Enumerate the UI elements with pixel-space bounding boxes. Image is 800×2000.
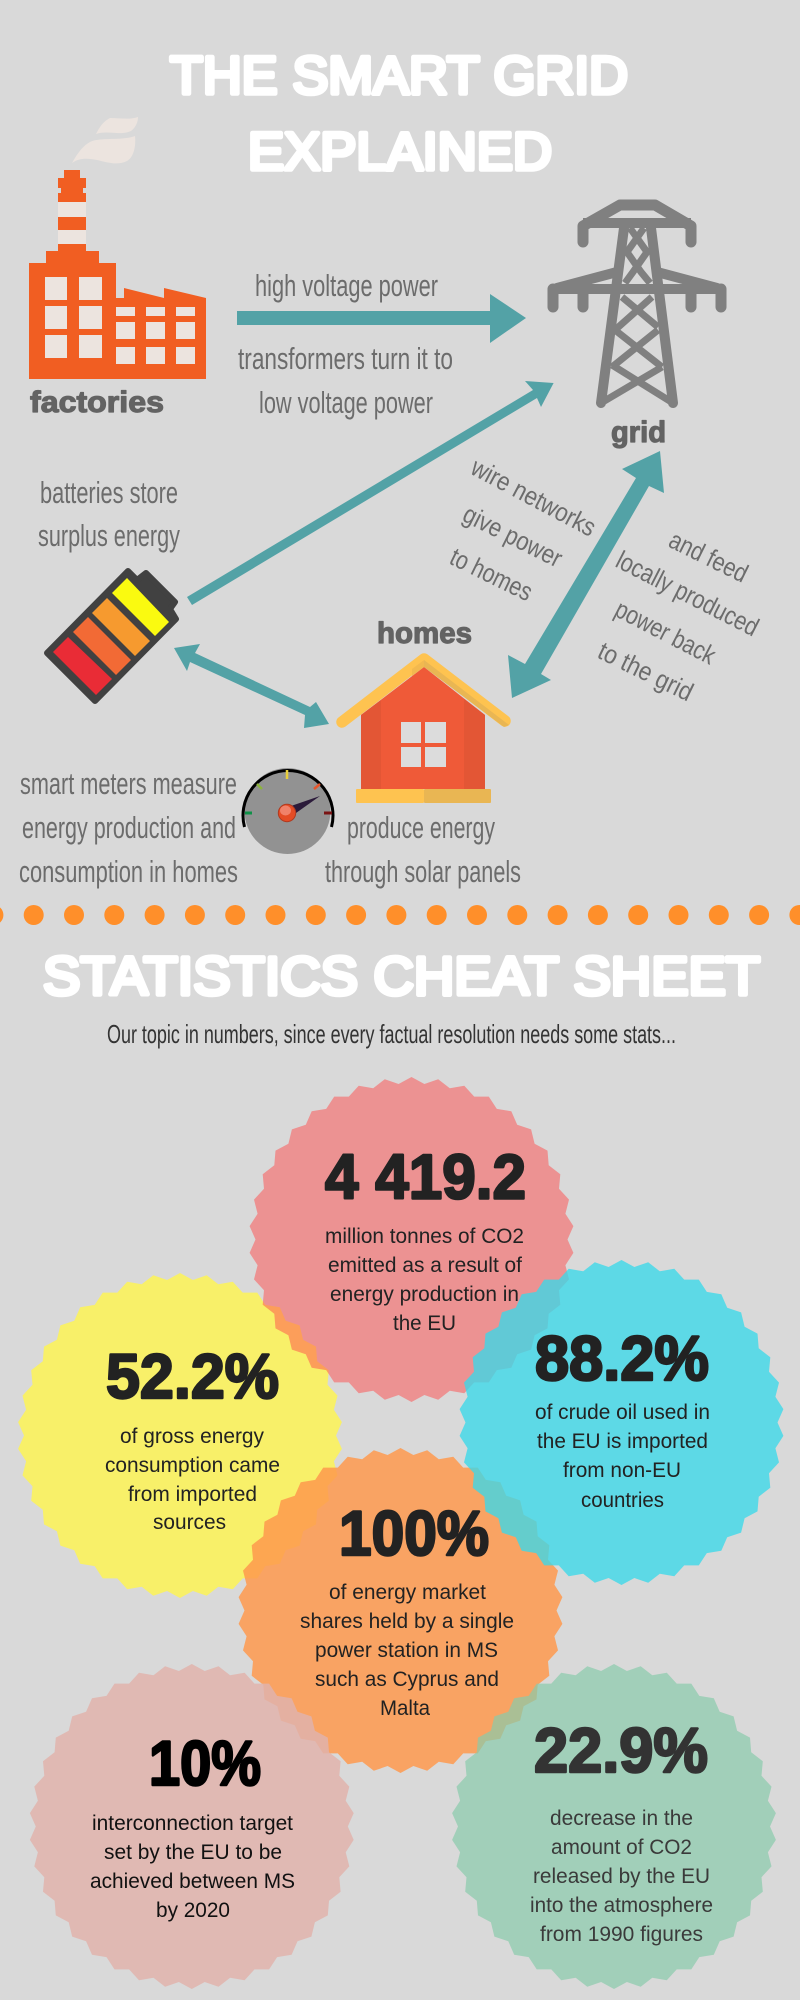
title: THE SMART GRID	[170, 46, 628, 106]
badge: 88.2% cyan: 88.2%	[535, 1324, 709, 1394]
badge: 52.2% yellow: consumption came	[105, 1454, 280, 1477]
text: produce energy: through solar panels	[325, 854, 521, 889]
text: batteries store surplus energy	[38, 475, 180, 553]
badge: 10% rose: set by the EU to be	[104, 1841, 282, 1864]
title: EXPLAINED	[248, 122, 552, 182]
text: high voltage power: high voltage power	[255, 268, 438, 303]
badge: 88.2% cyan	[460, 1260, 783, 1585]
text: smart meters: smart meters measure	[20, 766, 237, 801]
text: transformers: low voltage power	[259, 385, 433, 420]
arrow: battery to grid	[187, 381, 554, 605]
text: transformers: transformers turn it to	[238, 341, 453, 376]
badge: 22.9% green: amount of CO2	[551, 1836, 692, 1859]
text: and feed locally produced power back to the grid: and feed	[664, 524, 753, 588]
badge: 10% rose: interconnection target	[92, 1812, 293, 1835]
badge: 88.2% cyan: from non-EU	[563, 1459, 681, 1482]
badge: 4 419.2 pink: million tonnes of CO2	[325, 1225, 524, 1248]
badge: 100% orange: such as Cyprus and	[315, 1668, 499, 1691]
label: homes: homes	[377, 617, 472, 650]
text: smart meters: energy production and	[22, 810, 236, 845]
badge: 4 419.2 pink: the EU	[393, 1312, 456, 1335]
title	[170, 46, 628, 182]
badge: 10% rose: achieved between MS	[90, 1870, 295, 1893]
arrow: grid and homes two-way	[508, 451, 664, 698]
text: wire networks give power to homes	[445, 451, 601, 607]
icon: transmission tower	[553, 205, 721, 403]
text: and feed locally produced power back to the grid	[593, 524, 764, 707]
icon: gauge	[243, 768, 333, 854]
heading: statistics cheat sheet: STATISTICS CHEAT SHEET	[43, 946, 760, 1006]
badge: 100% orange: 100%	[339, 1499, 489, 1569]
badge: 4 419.2 pink	[250, 1077, 573, 1402]
badge: 22.9% green: 22.9%	[534, 1716, 708, 1786]
icon: factory	[29, 117, 206, 379]
badge: 10% rose: 10%	[149, 1729, 261, 1799]
badge: 22.9% green: into the atmosphere	[530, 1894, 713, 1917]
dotted separator	[0, 905, 800, 925]
badge: 88.2% cyan: countries	[581, 1489, 664, 1512]
text: and feed locally produced power back to the grid: to the grid	[593, 635, 698, 707]
icon: house	[342, 659, 509, 803]
text: transformers	[238, 341, 453, 420]
badge: 52.2% yellow: from imported	[128, 1483, 257, 1506]
badge: 100% orange: shares held by a single	[300, 1610, 514, 1633]
badge: 4 419.2 pink: energy production in	[330, 1283, 519, 1306]
text: produce energy	[325, 810, 521, 889]
badge: 52.2% yellow: of gross energy	[120, 1425, 264, 1448]
badge: 100% orange: power station in MS	[315, 1639, 498, 1662]
badge: 88.2% cyan: of crude oil used in	[535, 1401, 710, 1424]
text: produce energy: produce energy	[347, 810, 495, 845]
badge: 100% orange: Malta	[380, 1697, 430, 1720]
badge: 10% rose	[30, 1664, 354, 1989]
badge: 22.9% green: from 1990 figures	[540, 1923, 703, 1946]
text: and feed locally produced power back to the grid: locally produced	[611, 545, 764, 642]
text: wire networks give power to homes: to homes	[445, 541, 538, 607]
text: wire networks give power to homes: give power	[458, 499, 568, 573]
badge: 4 419.2 pink: emitted as a result of	[328, 1254, 522, 1277]
badge: 22.9% green: decrease in the	[550, 1807, 693, 1830]
badge: 52.2% yellow: 52.2%	[106, 1342, 279, 1412]
text: smart meters	[19, 766, 238, 889]
badge: 100% orange	[239, 1448, 562, 1773]
text: batteries store surplus energy: surplus energy	[38, 518, 180, 553]
badge: 100% orange: of energy market	[329, 1581, 486, 1604]
badge: 52.2% yellow	[18, 1273, 342, 1598]
badge: 22.9% green: released by the EU	[533, 1865, 710, 1888]
arrow: factories to grid	[237, 294, 526, 343]
badge: 88.2% cyan: the EU is imported	[537, 1430, 708, 1453]
badge: 10% rose: by 2020	[156, 1899, 230, 1922]
badge: 22.9% green	[452, 1664, 776, 1989]
text: wire networks give power to homes: wire networks	[465, 451, 601, 542]
badge: 52.2% yellow: sources	[153, 1511, 226, 1534]
arrow: battery and homes two-way	[174, 644, 329, 728]
label: grid: grid	[611, 416, 666, 449]
text: and feed locally produced power back to the grid: power back	[610, 594, 722, 671]
icon: battery	[47, 571, 176, 701]
label: factories: factories	[30, 386, 164, 419]
text: smart meters: consumption in homes	[19, 854, 238, 889]
badge: 4 419.2 pink: 4 419.2	[325, 1142, 526, 1212]
text: batteries store surplus energy: batteries store	[40, 475, 178, 510]
